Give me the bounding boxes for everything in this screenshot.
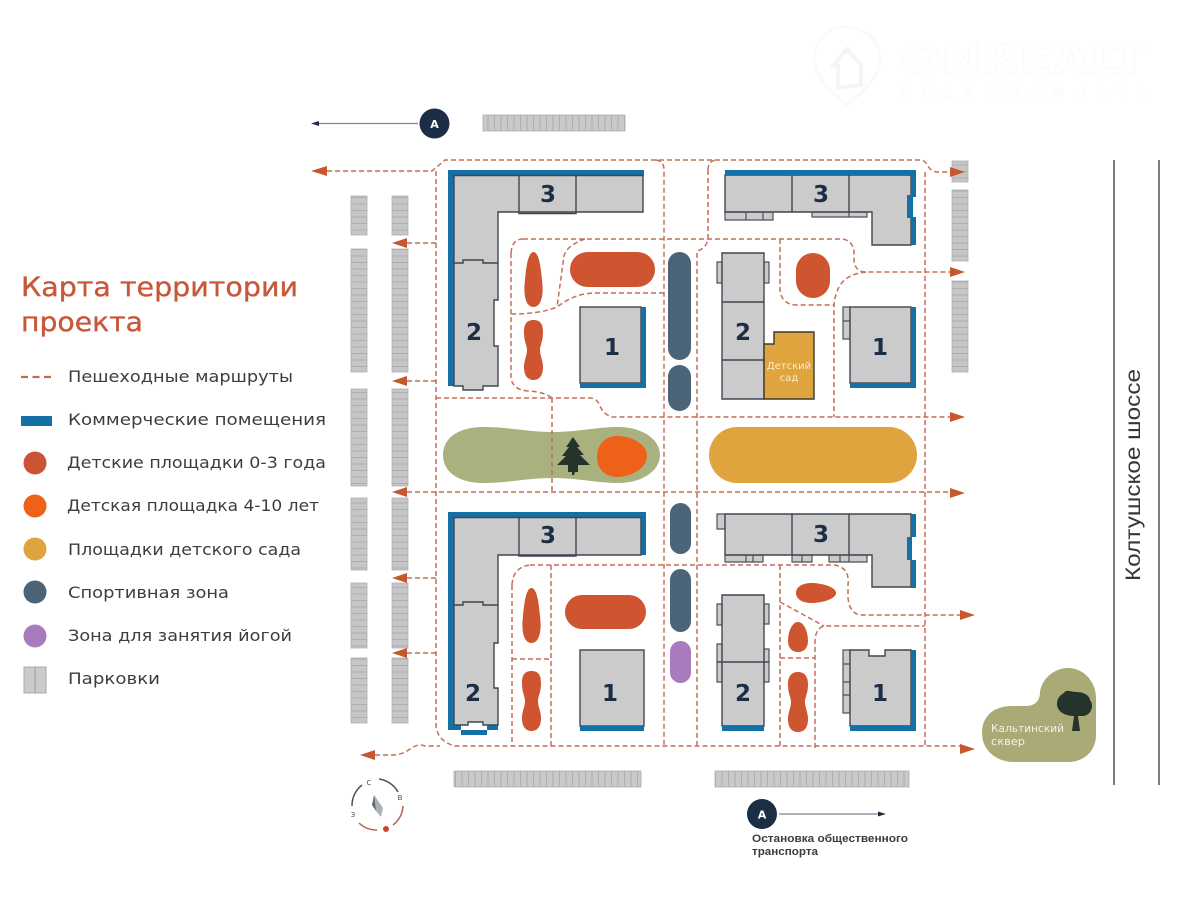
title	[21, 272, 298, 338]
public transport stop label: Остановка общественного	[752, 833, 908, 845]
park: Кальтинский сквер: сквер	[991, 736, 1025, 748]
commercial strip SW	[448, 512, 646, 735]
legend item: sports zone	[24, 580, 229, 604]
building 3/2 SW	[454, 518, 641, 725]
building 3/2 NW	[454, 176, 643, 390]
kindergarten building: Детский	[767, 361, 811, 372]
public transport stop label: транспорта	[752, 846, 819, 858]
legend item: playground 4-10: Детская площадка 4-10 лет	[67, 496, 319, 515]
building 3 NE	[725, 170, 916, 245]
legend item: kindergarten playgrounds	[24, 538, 301, 560]
legend item: parking	[24, 667, 160, 693]
block SE buildings	[717, 514, 916, 731]
public transport stop label	[752, 833, 908, 858]
building 1 SW	[580, 650, 644, 731]
section marker A bottom	[747, 799, 886, 829]
title: проекта	[21, 307, 143, 338]
icon: tree	[1057, 691, 1092, 731]
legend item: kindergarten playgrounds: Площадки детского сада	[68, 540, 301, 559]
building 1 NE	[843, 307, 916, 388]
block SW buildings	[448, 512, 646, 735]
block NW buildings	[448, 170, 646, 390]
building 1 NW	[580, 307, 646, 388]
icon: fir tree	[557, 437, 590, 475]
building 1 SE	[843, 650, 916, 731]
section marker A bottom: А	[758, 808, 767, 822]
block NE playground	[796, 253, 830, 298]
watermark: ONREALT: ONREALT	[900, 35, 1146, 84]
watermark: ONREALT: НЕДВИЖИМОСТЬ	[900, 85, 1147, 103]
building 3 SE	[717, 514, 916, 588]
legend item: commercial premises: Коммерческие помещения	[68, 410, 326, 429]
block SW playgrounds	[522, 588, 646, 731]
park: Кальтинский сквер: Кальтинский	[991, 723, 1064, 735]
legend item: yoga zone	[24, 624, 292, 648]
block SW buildings: 3	[540, 523, 556, 549]
playground 4-10	[597, 436, 647, 477]
yoga zone	[670, 641, 691, 683]
legend item: playground 4-10	[24, 494, 319, 518]
compass: В	[398, 794, 403, 802]
section marker A top	[311, 108, 450, 138]
kindergarten playground	[709, 427, 917, 483]
watermark: ONREALT	[814, 27, 1147, 105]
route arrows	[311, 166, 975, 760]
building 1 NW: 1	[604, 335, 620, 361]
building 2 SE	[717, 595, 769, 731]
title: Карта территории	[21, 272, 298, 303]
building 3 NE: 3	[813, 182, 829, 208]
building 2 SE: 2	[735, 681, 751, 707]
legend item: yoga zone: Зона для занятия йогой	[68, 626, 292, 645]
block NW playgrounds	[524, 252, 655, 380]
building 1 SE: 1	[872, 681, 888, 707]
block SW buildings: 2	[465, 681, 481, 707]
parking lots	[351, 115, 968, 787]
building 3 SE: 3	[813, 522, 829, 548]
building 1 SW: 1	[602, 681, 618, 707]
block SE playgrounds	[788, 583, 836, 732]
sports zones	[668, 252, 691, 632]
legend item: playgrounds 0-3: Детские площадки 0-3 года	[67, 453, 326, 472]
legend item: playgrounds 0-3	[24, 452, 326, 474]
section marker A top: А	[430, 118, 439, 131]
building 2 NE	[717, 253, 769, 399]
block NW buildings: 2	[466, 320, 482, 346]
legend item: sports zone: Спортивная зона	[68, 583, 229, 602]
building 2 NE: 2	[735, 320, 751, 346]
block NE buildings	[717, 170, 916, 399]
pedestrian routes	[327, 160, 960, 755]
legend	[21, 367, 326, 693]
building 1 NE: 1	[872, 335, 888, 361]
compass: З	[351, 811, 356, 819]
park strip	[443, 427, 660, 483]
park: Кальтинский сквер	[982, 668, 1096, 762]
block NW buildings: 3	[540, 182, 556, 208]
kindergarten building: сад	[780, 373, 798, 384]
compass: С	[367, 779, 372, 787]
compass	[351, 779, 403, 832]
legend item: pedestrian routes: Пешеходные маршруты	[68, 367, 293, 386]
road: Колтушское шоссе: Колтушское шоссе	[1122, 369, 1145, 581]
legend item: parking: Парковки	[68, 669, 160, 688]
kindergarten building	[764, 332, 814, 399]
commercial strip NW	[448, 170, 644, 386]
